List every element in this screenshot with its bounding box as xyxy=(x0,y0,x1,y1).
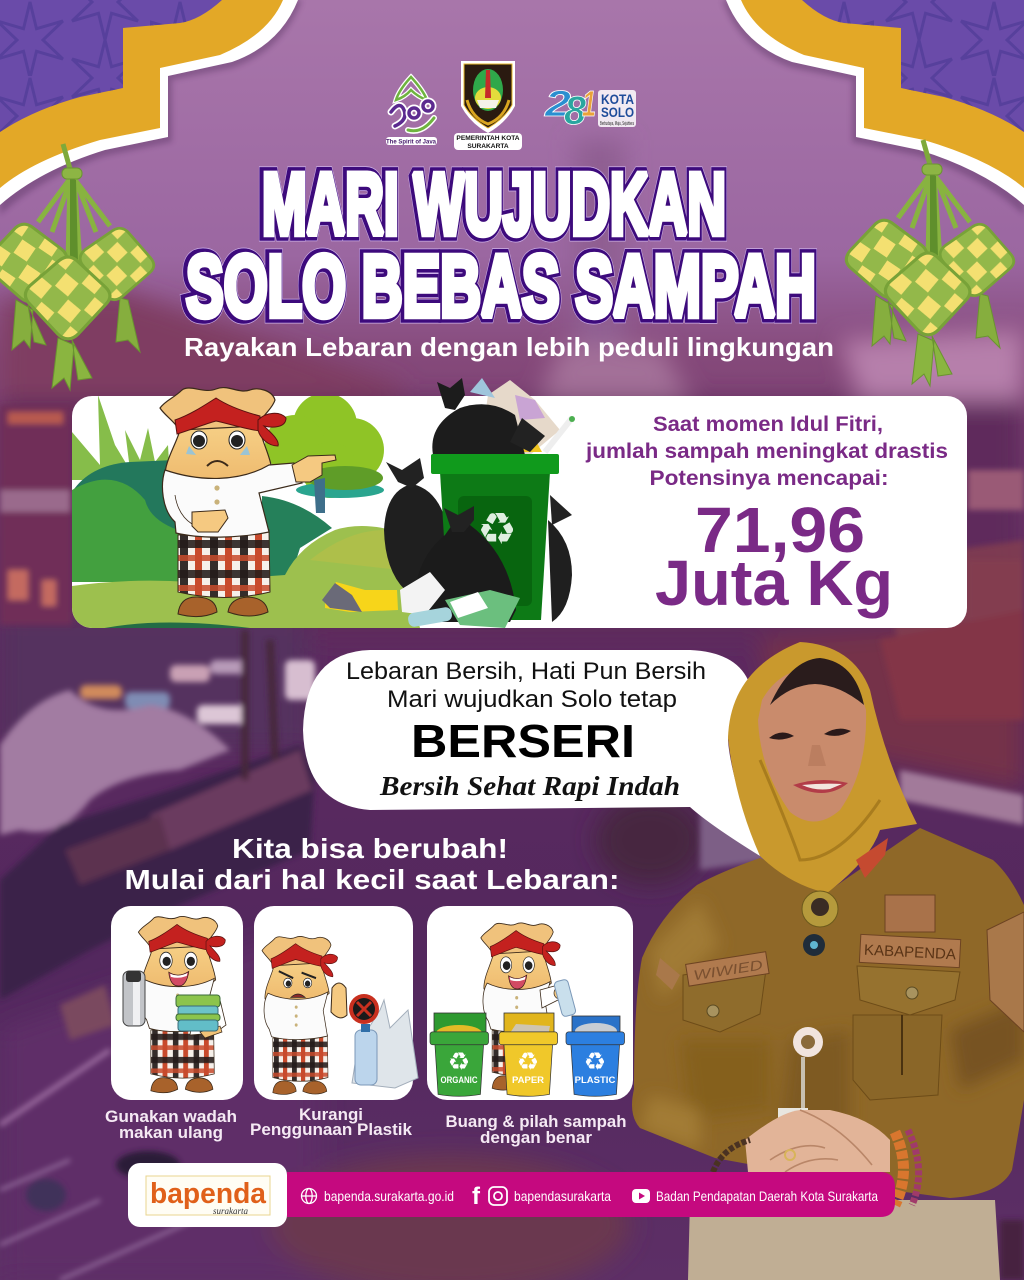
logo: bapenda surakarta xyxy=(128,1163,287,1227)
illustration: garbage pile and green bin: ♻ xyxy=(477,504,517,555)
panel: waste statistic xyxy=(72,378,967,630)
logo: 281 Kota Solo: 8 xyxy=(564,89,587,133)
statistic text block: Potensinya mencapai: xyxy=(650,466,888,490)
title: MARI WUJUDKAN xyxy=(260,156,726,253)
logo: Solo The Spirit of Java: The Spirit of Java xyxy=(386,140,437,146)
title: MARI WUJUDKAN xyxy=(262,156,726,253)
illustration: scattered litter xyxy=(322,572,520,628)
statistic text block xyxy=(585,412,948,619)
card: sort waste: ORGANIC xyxy=(440,1075,478,1086)
speech bubble: BERSERI xyxy=(411,715,635,767)
logo: 281 Kota Solo: 2 xyxy=(544,83,571,124)
icon: instagram xyxy=(489,1187,507,1205)
card: reduce plastic xyxy=(254,906,418,1100)
portrait: Kabapenda official: WIWIED xyxy=(692,956,764,983)
card: sort waste: ♻ xyxy=(448,1047,470,1076)
card: sort waste xyxy=(427,906,633,1100)
scene: park landscape xyxy=(72,393,420,630)
logo: 281 Kota Solo: SOLO xyxy=(601,104,634,120)
card: sort waste: ♻ xyxy=(517,1047,539,1076)
portrait: Kabapenda official xyxy=(632,642,1024,1280)
caption: sort waste: Buang & pilah sampah xyxy=(446,1113,626,1131)
title: MARI WUJUDKAN xyxy=(260,156,726,253)
card: sort waste: PAPER xyxy=(512,1075,544,1086)
footer bar: contact links xyxy=(287,1172,895,1217)
caption: reduce plastic: Penggunaan Plastik xyxy=(250,1121,413,1139)
statistic text block: Saat momen Idul Fitri, xyxy=(653,412,883,436)
statistic text block: Juta Kg xyxy=(655,547,893,619)
portrait: Kabapenda official: KABAPENDA xyxy=(864,942,956,963)
speech bubble: Mari wujudkan Solo tetap xyxy=(387,686,677,713)
heading: call to action: Mulai dari hal kecil saat Lebaran: xyxy=(124,864,620,895)
speech bubble: Lebaran Bersih, Hati Pun Bersih xyxy=(346,658,706,685)
card: sort waste: ♻ xyxy=(584,1047,606,1076)
face xyxy=(758,668,866,822)
icon: ketupat left xyxy=(0,144,157,390)
card: sort waste: PLASTIC xyxy=(575,1075,615,1086)
bracelets xyxy=(895,1132,904,1205)
icon: youtube xyxy=(632,1189,650,1203)
caption: sort waste xyxy=(446,1113,626,1147)
icon: facebook: f xyxy=(472,1183,481,1210)
pendant and lanyard xyxy=(802,891,838,927)
caption: reusable containers: Gunakan wadah xyxy=(105,1108,237,1126)
corner frame: top right gold arch xyxy=(722,0,1024,215)
logo: Solo The Spirit of Java xyxy=(386,77,437,146)
caption: reusable containers: makan ulang xyxy=(119,1124,223,1142)
insignia and name tags xyxy=(885,895,935,932)
illustration: garbage pile and green bin xyxy=(384,378,575,622)
card: reusable containers xyxy=(111,906,243,1100)
footer bar: contact links: bapendasurakarta xyxy=(514,1188,611,1204)
speech bubble: Bersih Sehat Rapi Indah xyxy=(379,771,680,801)
logo: 281 Kota Solo xyxy=(544,83,636,133)
heading: call to action xyxy=(124,833,620,895)
logo: Pemerintah Kota Surakarta crest xyxy=(454,61,522,150)
speech bubble xyxy=(303,650,760,856)
hijab xyxy=(728,642,917,893)
caption: reduce plastic xyxy=(250,1106,413,1139)
logo: 281 Kota Solo: KOTA xyxy=(601,91,634,107)
logo: Pemerintah Kota Surakarta crest: PEMERINTAH KOTA xyxy=(456,135,520,142)
caption: sort waste: dengan benar xyxy=(480,1129,593,1147)
hands xyxy=(745,1110,890,1172)
icon: globe xyxy=(302,1188,316,1204)
title xyxy=(184,156,816,335)
icon: ketupat right xyxy=(843,140,1017,386)
statistic text block: 71,96 xyxy=(695,494,865,566)
trousers xyxy=(688,1200,1000,1280)
logo: 281 Kota Solo: 1 xyxy=(582,83,596,124)
footer bar: contact links: Badan Pendapatan Daerah Kota Surakarta xyxy=(656,1188,878,1204)
statistic text block: jumlah sampah meningkat drastis xyxy=(585,439,948,463)
heading: call to action: Kita bisa berubah! xyxy=(232,833,508,864)
uniform xyxy=(632,828,1024,1198)
caption: reusable containers xyxy=(105,1108,237,1142)
subtitle: Rayakan Lebaran dengan lebih peduli lingkungan xyxy=(184,332,834,362)
caption: reduce plastic: Kurangi xyxy=(299,1106,363,1124)
logo: bapenda surakarta: bapenda xyxy=(150,1178,267,1210)
logo: 281 Kota Solo: Berbudaya, Maju, Sejahtera xyxy=(600,121,634,127)
footer bar: contact links: bapenda.surakarta.go.id xyxy=(324,1188,454,1204)
logo: Pemerintah Kota Surakarta crest: SURAKARTA xyxy=(467,143,509,150)
illustration: pointing sad mascot xyxy=(160,388,336,617)
corner frame: top left gold arch xyxy=(0,0,302,215)
logo: bapenda surakarta: surakarta xyxy=(213,1206,249,1216)
